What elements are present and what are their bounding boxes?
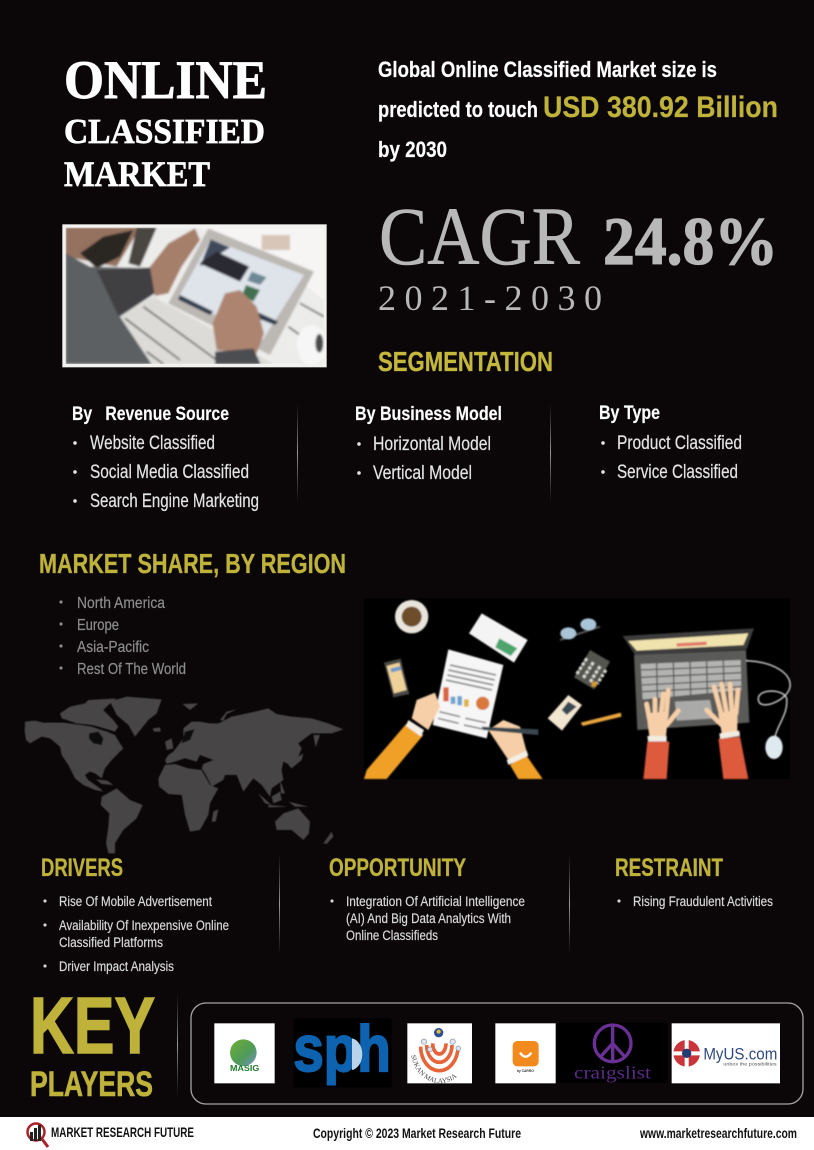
world map xyxy=(25,697,343,853)
logo: MyUS.com: MyUS.com xyxy=(703,1044,777,1063)
photo: man using tablet xyxy=(62,224,327,367)
segment column: revenue source: Search Engine Marketing xyxy=(90,491,259,512)
region list: Asia-Pacific xyxy=(77,639,149,656)
segment column: revenue source: Website Classified xyxy=(90,433,215,454)
market size statement: predicted to touch xyxy=(378,97,538,122)
logo: MASIG xyxy=(214,1023,275,1083)
panel: drivers: Availability Of Inexpensive Online xyxy=(59,918,229,933)
footer brand: MARKET RESEARCH FUTURE xyxy=(51,1124,194,1140)
icon: left typing hand xyxy=(643,690,678,779)
logo: Sukan Malaysia: SUKAN MALAYSIA xyxy=(411,1055,457,1084)
segment column: revenue source: Social Media Classified xyxy=(90,462,249,483)
segment column: type: Product Classified xyxy=(617,433,742,454)
panel: opportunity xyxy=(329,854,525,943)
market size statement: USD 380.92 Billion xyxy=(543,91,778,124)
segment column: revenue source: By Revenue Source xyxy=(72,404,229,425)
icon: calculator xyxy=(574,650,610,689)
icon: envelope xyxy=(469,613,528,663)
logo: craigslist xyxy=(557,1023,667,1083)
title xyxy=(64,50,267,194)
logo: craigslist: craigslist xyxy=(574,1062,651,1082)
footer xyxy=(0,1117,814,1150)
heading: key players: PLAYERS xyxy=(30,1065,153,1104)
panel: restraint xyxy=(615,854,773,909)
segment column: type xyxy=(599,403,742,483)
icon: laptop xyxy=(623,628,754,730)
segment column: revenue source xyxy=(72,404,259,512)
eurasia africa oceania xyxy=(158,703,343,844)
CAGR figure: CAGR xyxy=(379,190,581,282)
icon: left arm xyxy=(364,693,440,779)
region list: Rest Of The World xyxy=(77,661,186,678)
segment column: type: Service Classified xyxy=(617,462,738,483)
region list xyxy=(60,595,186,678)
icon: market research future logo xyxy=(28,1124,48,1147)
logo: SPH: sph xyxy=(293,1012,391,1085)
region list: Europe xyxy=(77,617,119,634)
illustration: desk with laptop and documents xyxy=(364,598,790,779)
copyright: Copyright © 2023 Market Research Future xyxy=(313,1126,521,1141)
title: MARKET xyxy=(64,154,210,194)
title: ONLINE xyxy=(64,50,267,110)
icon: report paper and charts xyxy=(433,649,503,738)
logos: MASIG, SPH, Sukan Malaysia xyxy=(214,1012,472,1087)
icon: pencil xyxy=(581,713,622,726)
icon: mouse and cable xyxy=(746,661,790,759)
segment column: business model xyxy=(355,404,502,484)
panel: opportunity: OPPORTUNITY xyxy=(329,854,466,882)
logo: MyUS.com xyxy=(672,1023,780,1083)
segment column: business model: By Business Model xyxy=(355,404,502,425)
heading: key players: KEY xyxy=(30,981,155,1070)
heading: market share by region: MARKET SHARE, BY REGION xyxy=(39,548,346,579)
CAGR figure: 2021-2030 xyxy=(378,278,602,318)
panel: drivers: Driver Impact Analysis xyxy=(59,959,174,974)
icon: right arm with pen xyxy=(482,720,543,779)
panel: drivers xyxy=(41,854,229,974)
region list: North America xyxy=(77,595,165,612)
market size statement: Global Online Classified Market size is xyxy=(378,57,717,82)
panel: drivers: Classified Platforms xyxy=(59,935,163,950)
panel: drivers: DRIVERS xyxy=(41,854,123,882)
CAGR figure xyxy=(378,190,778,318)
icon: glasses xyxy=(560,618,600,640)
segment column: business model: Horizontal Model xyxy=(373,434,491,455)
segment column: type: By Type xyxy=(599,403,660,424)
market size statement xyxy=(378,57,778,162)
segment column: business model: Vertical Model xyxy=(373,463,472,484)
panel: key player logos xyxy=(190,1002,804,1105)
logo: MyUS.com: unbox the possibilities xyxy=(723,1062,777,1067)
logo: Sukan Malaysia xyxy=(407,1023,472,1084)
panel: opportunity: Integration Of Artificial Intelligence xyxy=(346,894,525,909)
market size statement: by 2030 xyxy=(378,137,447,162)
panel: opportunity: Online Classifieds xyxy=(346,928,438,943)
title: CLASSIFIED xyxy=(64,112,265,151)
panel: restraint: RESTRAINT xyxy=(615,854,723,882)
logo: Carro: by CARRO xyxy=(517,1069,534,1073)
icon: notepad xyxy=(548,695,582,731)
logo: Carro xyxy=(495,1023,556,1083)
logos: Carro, craigslist, MyUS xyxy=(495,1023,780,1083)
heading: segmentation: SEGMENTATION xyxy=(378,346,553,377)
panel: restraint: Rising Fraudulent Activities xyxy=(633,894,773,909)
heading: key players xyxy=(30,981,155,1104)
CAGR figure: 24.8% xyxy=(603,203,778,279)
icon: phone xyxy=(384,659,409,697)
icon: right typing hand xyxy=(707,684,748,779)
logo: MASIG: MASIG xyxy=(230,1063,260,1073)
americas xyxy=(25,697,162,853)
panel: drivers: Rise Of Mobile Advertisement xyxy=(59,894,212,909)
panel: opportunity: (AI) And Big Data Analytics With xyxy=(346,911,511,926)
icon: coffee cup xyxy=(395,600,428,633)
